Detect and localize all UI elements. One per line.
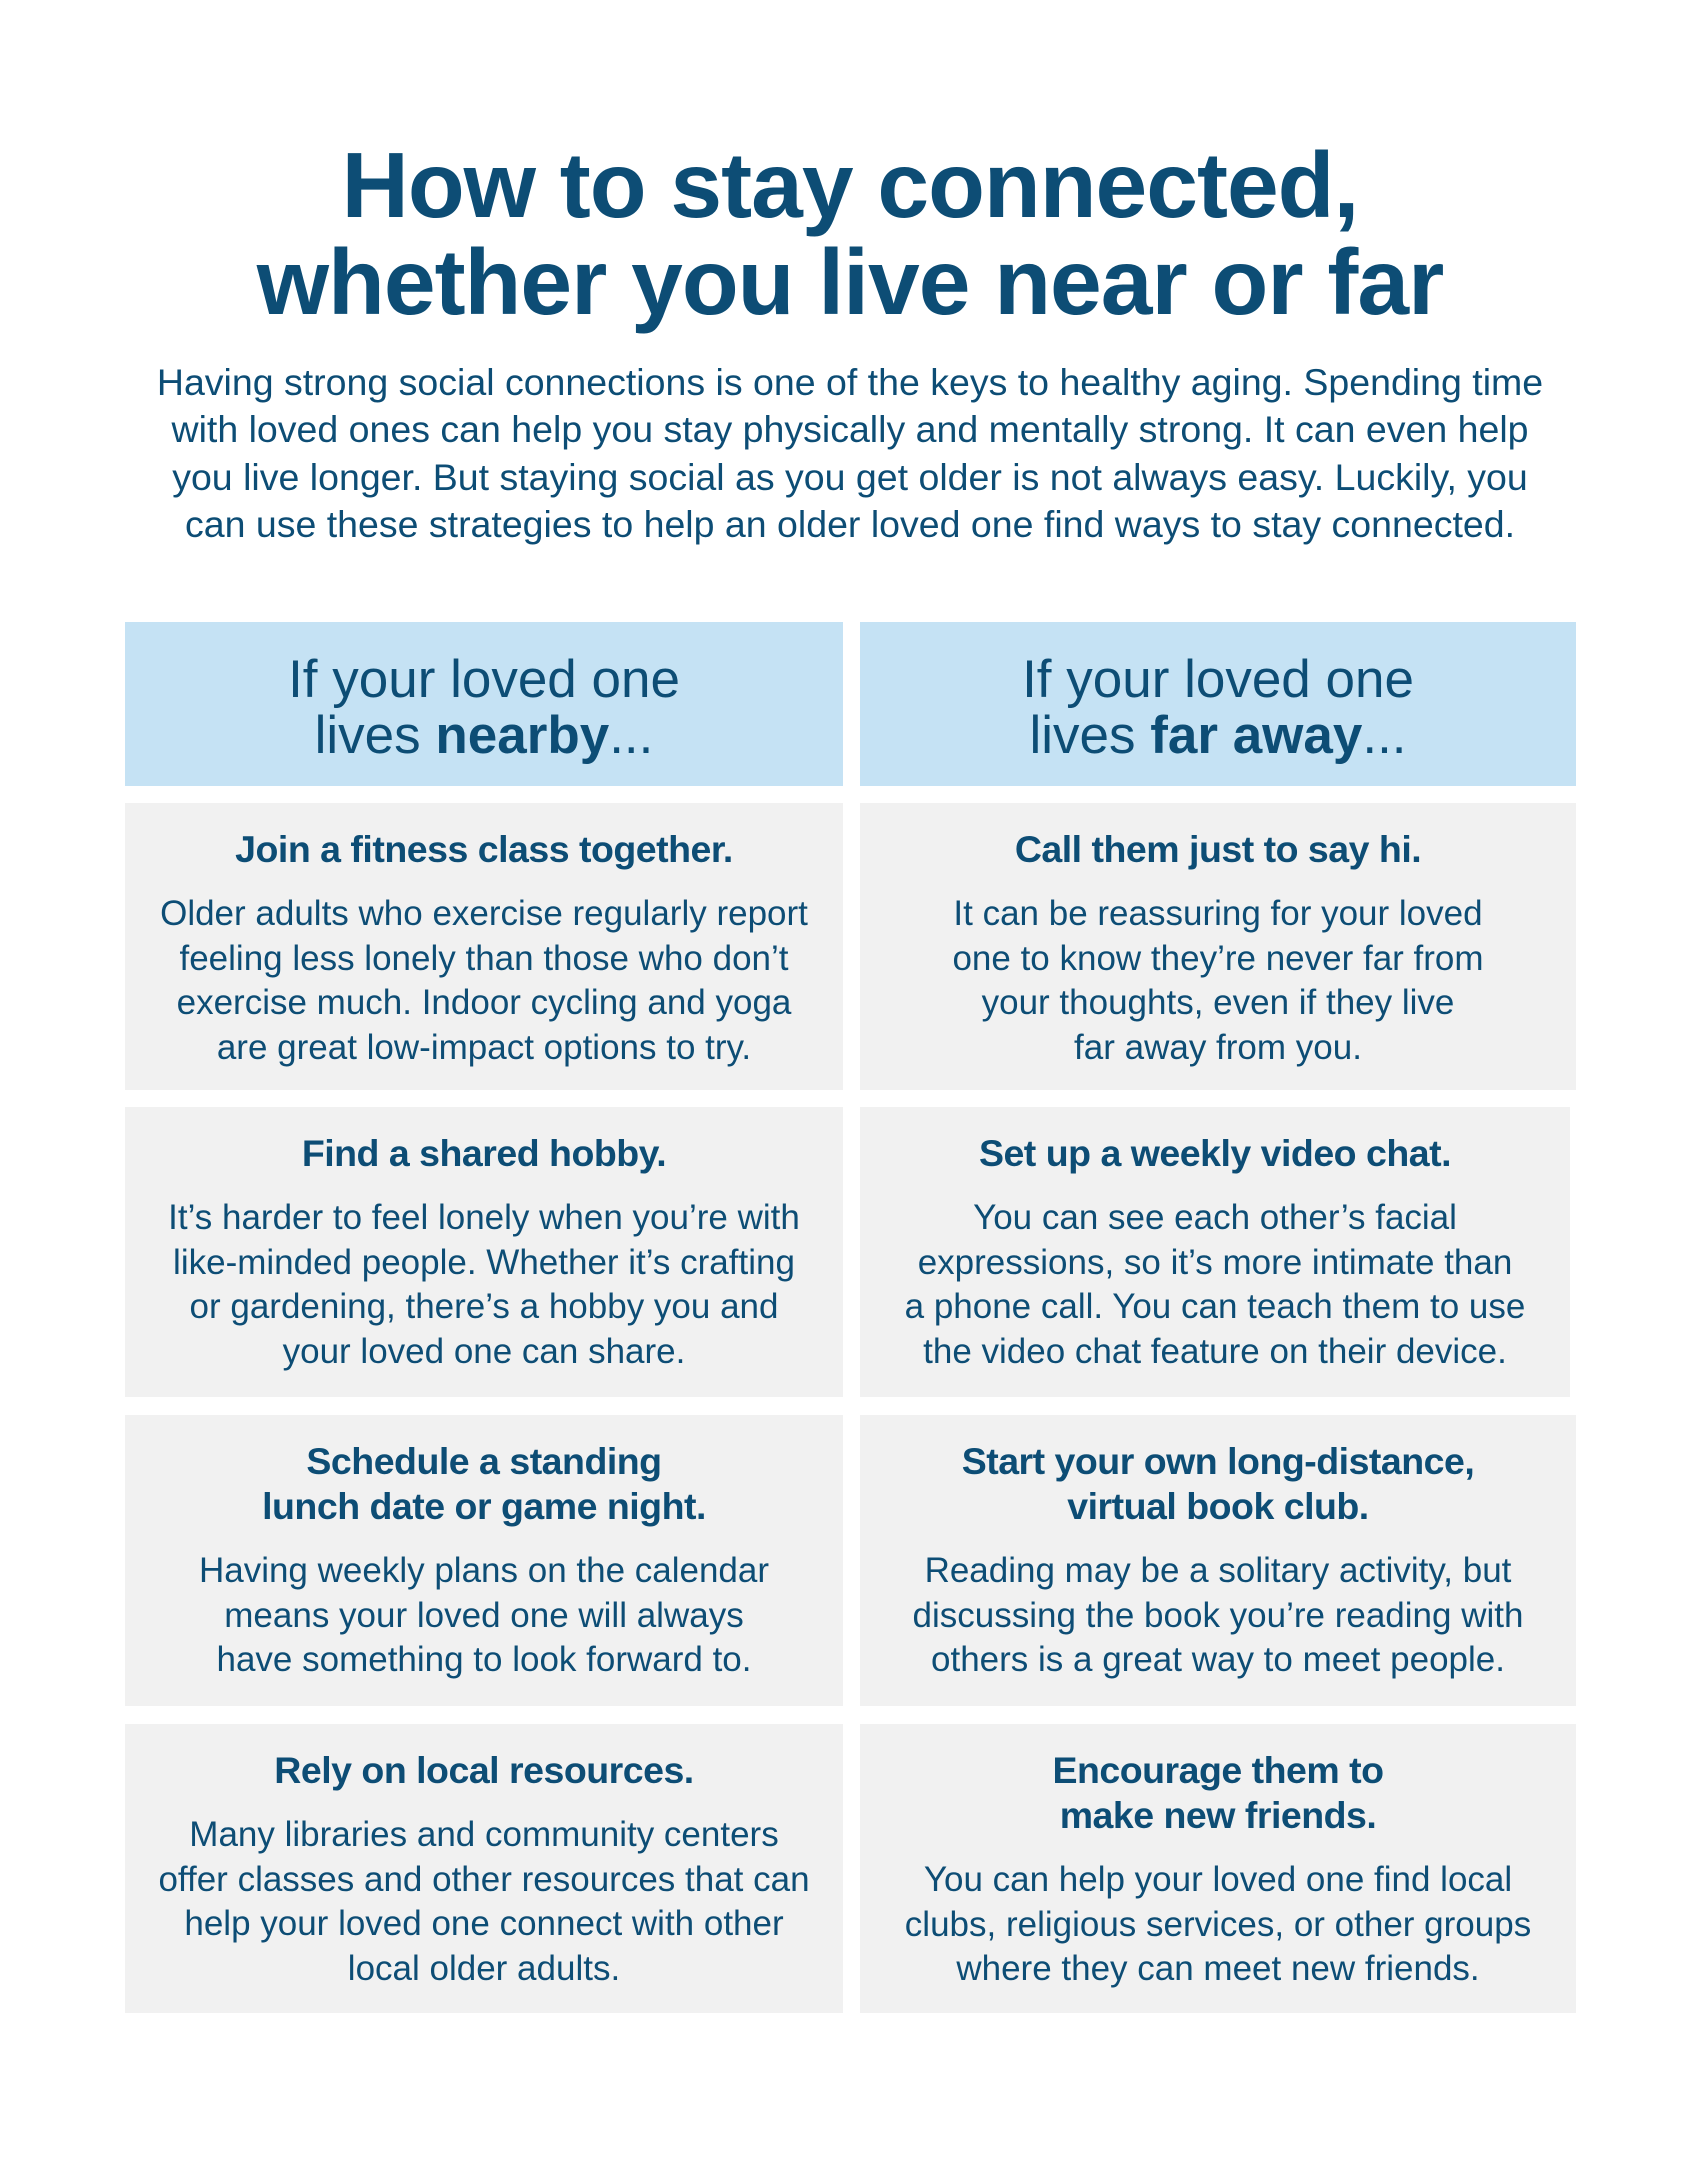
card: hobby: or gardening, there’s a hobby you and [190, 1287, 778, 1326]
card: video chat [860, 1107, 1570, 1397]
card: call: far away from you. [1074, 1028, 1362, 1066]
card: video chat: Set up a weekly video chat. [979, 1132, 1451, 1174]
card: video chat: You can see each other’s facial [973, 1198, 1457, 1237]
header: far away: If your loved one [1022, 650, 1414, 709]
card: book club: Start your own long-distance, [962, 1440, 1474, 1482]
intro text [157, 361, 1543, 545]
card: call: It can be reassuring for your loved [953, 894, 1483, 933]
card: fitness class: feeling less lonely than those who don’t [179, 938, 788, 978]
card: lunch date [125, 1415, 843, 1706]
card: book club: Reading may be a solitary activity, but [925, 1551, 1511, 1590]
intro text: Having strong social connections is one of the keys to healthy aging. Spending time [157, 361, 1543, 403]
card: lunch date: Schedule a standing [306, 1440, 662, 1482]
header: far away [860, 622, 1576, 786]
header: nearby [125, 622, 843, 786]
card: book club: virtual book club. [1067, 1485, 1369, 1527]
card: lunch date: means your loved one will always [224, 1596, 744, 1634]
card: video chat: a phone call. You can teach them to use [905, 1287, 1525, 1326]
card: call: one to know they’re never far from [952, 938, 1484, 978]
card: video chat: expressions, so it’s more intimate than [918, 1242, 1512, 1282]
title [256, 133, 1443, 334]
card: fitness class: Join a fitness class together. [235, 828, 733, 870]
intro text: you live longer. But staying social as you get older is not always easy. Luckily, you [172, 456, 1528, 498]
card: lunch date: have something to look forward to. [216, 1640, 752, 1679]
intro text: with loved ones can help you stay physically and mentally strong. It can even help [171, 408, 1529, 450]
card: local resources: Many libraries and community centers [189, 1815, 779, 1854]
card: fitness class [125, 803, 843, 1090]
card: local resources: Rely on local resources. [274, 1749, 694, 1791]
card: hobby: like-minded people. Whether it’s crafting [173, 1242, 795, 1282]
title: whether you live near or far [257, 230, 1443, 334]
card: local resources [125, 1724, 843, 2013]
card: fitness class: are great low-impact options to try. [217, 1028, 751, 1066]
card: fitness class: Older adults who exercise regularly report [160, 894, 808, 933]
card: hobby: Find a shared hobby. [302, 1132, 666, 1174]
card: fitness class: exercise much. Indoor cycling and yoga [177, 983, 791, 1022]
header: nearby: lives nearby... [315, 706, 653, 765]
card: call [860, 803, 1576, 1090]
card: hobby: your loved one can share. [283, 1332, 685, 1370]
card: hobby [125, 1107, 843, 1397]
card: book club: discussing the book you’re reading with [913, 1596, 1523, 1634]
card: hobby: It’s harder to feel lonely when you’re with [168, 1198, 800, 1237]
card: new friends [860, 1724, 1576, 2013]
card: local resources: local older adults. [348, 1948, 620, 1988]
card: video chat: the video chat feature on their device. [923, 1332, 1507, 1370]
card: local resources: help your loved one connect with other [184, 1904, 784, 1943]
card: new friends: Encourage them to [1052, 1749, 1384, 1791]
header: far away: lives far away... [1029, 706, 1407, 765]
card: new friends: clubs, religious services, or other groups [905, 1904, 1531, 1944]
card: lunch date: Having weekly plans on the calendar [199, 1551, 769, 1590]
card: call: your thoughts, even if they live [982, 983, 1454, 1022]
card: call: Call them just to say hi. [1015, 828, 1421, 870]
title: How to stay connected, [342, 133, 1358, 237]
card: new friends: make new friends. [1060, 1794, 1376, 1836]
card: new friends: You can help your loved one find local [924, 1860, 1512, 1899]
card: local resources: offer classes and other resources that can [158, 1860, 810, 1898]
card: book club: others is a great way to meet people. [931, 1640, 1505, 1679]
card: book club [860, 1415, 1576, 1706]
intro text: can use these strategies to help an older loved one find ways to stay connected. [185, 503, 1515, 545]
card: lunch date: lunch date or game night. [262, 1485, 706, 1527]
card: new friends: where they can meet new friends. [956, 1949, 1480, 1988]
header: nearby: If your loved one [288, 650, 680, 709]
